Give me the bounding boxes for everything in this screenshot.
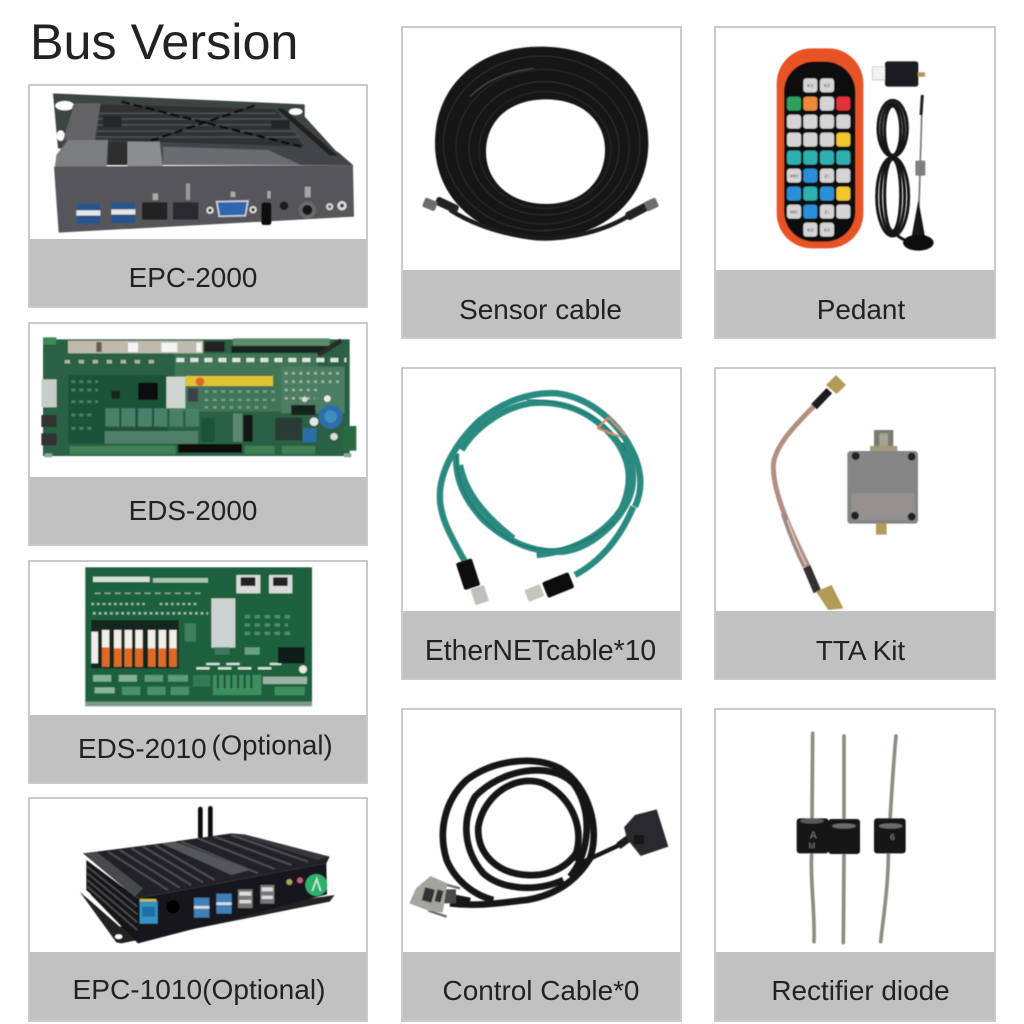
image: wireless pendant: WO bbox=[790, 173, 798, 179]
image: rectifier diodes: 6 bbox=[890, 832, 895, 842]
title: Bus Version bbox=[30, 13, 298, 70]
image: EDS-2000 circuit board bbox=[41, 337, 356, 457]
label: control cable: Control Cable*0 bbox=[443, 975, 639, 1006]
label: ethernet cable: EtherNETcable*10 bbox=[425, 634, 656, 666]
image: rectifier diodes: M bbox=[809, 841, 815, 850]
image: wireless pendant: K1 bbox=[807, 83, 814, 89]
image: wireless pendant bbox=[777, 48, 934, 251]
image: green ethernet cable bbox=[440, 393, 640, 605]
image: wireless pendant: K4 bbox=[824, 227, 830, 233]
label: pedant: Pedant bbox=[817, 294, 905, 325]
image: TTA cable and metal box bbox=[773, 375, 918, 610]
image: wireless pendant: K2 bbox=[824, 83, 830, 89]
image: black control cable bbox=[409, 761, 668, 917]
image: EPC-1010 fanless computer bbox=[80, 806, 335, 943]
label: EDS-2010 (Optional): EDS-2010 bbox=[78, 733, 207, 764]
label: rectifier diode: Rectifier diode bbox=[771, 975, 950, 1006]
image: wireless pendant: Z↑ bbox=[824, 173, 830, 179]
label: EDS-2010 (Optional) bbox=[78, 730, 333, 764]
label: EPC-2000: EPC-2000 bbox=[129, 262, 257, 293]
image: EDS-2010 circuit board bbox=[85, 567, 312, 706]
image: wireless pendant: WC bbox=[790, 209, 799, 215]
panel: pedant bbox=[715, 27, 995, 338]
panel: TTA kit bbox=[715, 368, 995, 679]
panel: control cable bbox=[402, 709, 681, 1021]
label: TTA kit: TTA Kit bbox=[816, 635, 905, 666]
panel: rectifier diode bbox=[715, 709, 995, 1021]
label: EDS-2000: EDS-2000 bbox=[129, 495, 257, 526]
panel: ethernet cable bbox=[402, 368, 681, 679]
image: wireless pendant: Z↓ bbox=[824, 209, 830, 215]
image: rectifier diodes: A bbox=[810, 830, 817, 841]
label: EPC-1010 (Optional): EPC-1010(Optional) bbox=[73, 974, 325, 1005]
label: EDS-2010 (Optional): (Optional) bbox=[212, 730, 333, 760]
image: wireless pendant: K3 bbox=[807, 227, 814, 233]
image: rectifier diodes bbox=[797, 733, 906, 943]
panel: EDS-2010 bbox=[29, 561, 367, 783]
panel: EPC-2000 bbox=[29, 85, 367, 307]
panel: sensor cable bbox=[402, 27, 681, 338]
label: sensor cable: Sensor cable bbox=[459, 294, 622, 325]
image: black sensor cable coil bbox=[422, 47, 659, 239]
image: EPC-2000 controller bbox=[53, 93, 354, 233]
panel: EPC-1010 bbox=[29, 798, 367, 1021]
panel: EDS-2000 bbox=[29, 323, 367, 545]
